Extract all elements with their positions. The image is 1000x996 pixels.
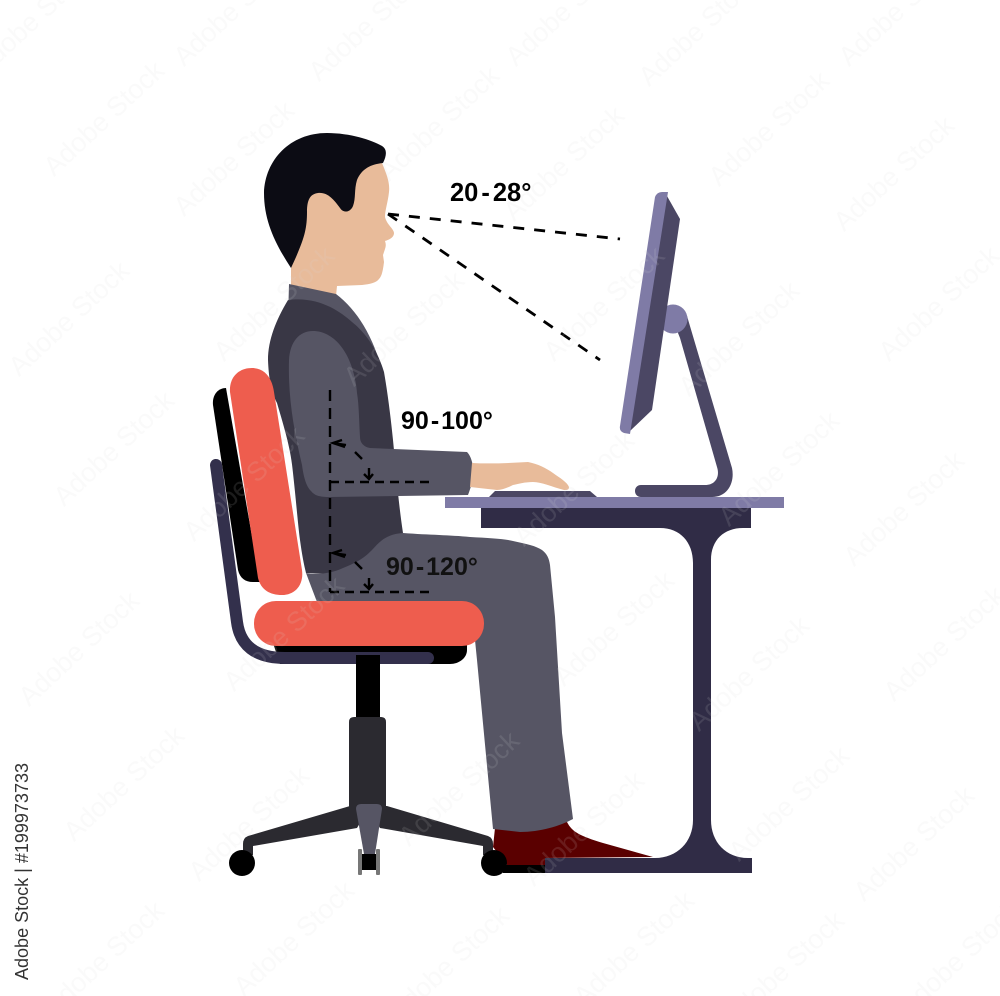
chair back frame xyxy=(216,465,428,658)
jacket collar xyxy=(288,284,386,410)
black back cushion xyxy=(213,388,260,582)
shoe xyxy=(493,822,653,865)
watermark pattern: Adobe Stock xyxy=(393,725,525,852)
knee horizontal guide xyxy=(330,591,433,593)
red backrest xyxy=(230,368,302,595)
stock image id: Adobe Stock | #199973733 xyxy=(12,763,32,980)
front caster xyxy=(358,849,380,875)
watermark pattern: Adobe Stock xyxy=(498,100,630,227)
vertical guide xyxy=(329,390,331,592)
watermark pattern: Adobe Stock xyxy=(518,765,650,892)
watermark pattern: Adobe Stock xyxy=(703,65,835,192)
watermark pattern: Adobe Stock xyxy=(338,265,470,392)
lower column xyxy=(349,717,386,810)
watermark pattern: Adobe Stock xyxy=(178,420,310,547)
hand xyxy=(470,462,569,490)
left wheel xyxy=(229,850,255,876)
watermark pattern: Adobe Stock xyxy=(723,740,855,867)
watermark pattern: Adobe Stock xyxy=(13,585,145,712)
stand joint xyxy=(658,304,688,334)
left base leg xyxy=(243,806,370,855)
hair xyxy=(264,133,386,268)
watermark pattern: Adobe Stock xyxy=(838,445,970,572)
watermark pattern: Adobe Stock xyxy=(3,255,135,382)
watermark pattern: Adobe Stock xyxy=(848,780,980,907)
office chair xyxy=(213,368,545,876)
watermark pattern: Adobe Stock xyxy=(548,565,680,692)
watermark pattern: Adobe Stock xyxy=(538,240,670,367)
elbow arrows xyxy=(333,440,373,479)
label: elbow angle: 90-100° xyxy=(401,407,493,435)
red seat xyxy=(254,601,484,646)
label: viewing angle: 20-28° xyxy=(450,179,531,207)
gas column xyxy=(356,655,380,718)
desk xyxy=(445,497,784,873)
elbow and knee angle guides xyxy=(330,390,433,592)
watermark pattern: Adobe Stock xyxy=(168,95,300,222)
right wheel xyxy=(481,850,507,876)
neck and face xyxy=(291,163,394,296)
elbow horizontal guide xyxy=(330,481,433,483)
right base leg xyxy=(367,806,493,855)
watermark pattern: Adobe Stock xyxy=(508,425,640,552)
watermark pattern: Adobe Stock xyxy=(218,570,350,697)
watermark pattern: Adobe Stock xyxy=(58,720,190,847)
watermark pattern: Adobe Stock xyxy=(208,240,340,367)
monitor stand xyxy=(635,316,733,497)
monitor screen edge xyxy=(620,192,668,434)
watermark pattern: Adobe Stock xyxy=(828,110,960,237)
desk leg and base xyxy=(481,508,752,873)
watermark pattern: Adobe Stock xyxy=(673,275,805,402)
under-seat black plate xyxy=(272,640,467,664)
label: knee angle: 90-120° xyxy=(386,553,478,581)
front base leg xyxy=(356,804,382,854)
desk top xyxy=(445,497,784,508)
jacket body xyxy=(268,299,403,575)
foot rest bar xyxy=(503,865,545,873)
watermark pattern: Adobe Stock xyxy=(48,385,180,512)
knee arrows xyxy=(333,550,373,589)
watermark pattern: Adobe Stock xyxy=(713,405,845,532)
watermark pattern: Adobe Stock xyxy=(373,60,505,187)
vision angle dashed lines xyxy=(388,214,620,360)
keyboard xyxy=(489,491,597,497)
watermark pattern: Adobe Stock xyxy=(183,760,315,887)
trouser leg xyxy=(306,533,573,832)
monitor xyxy=(620,192,733,497)
arm sleeve xyxy=(289,331,473,497)
watermark pattern: Adobe Stock xyxy=(38,55,170,182)
monitor back xyxy=(630,196,680,431)
man xyxy=(264,133,653,865)
watermark pattern: Adobe Stock xyxy=(683,610,815,737)
